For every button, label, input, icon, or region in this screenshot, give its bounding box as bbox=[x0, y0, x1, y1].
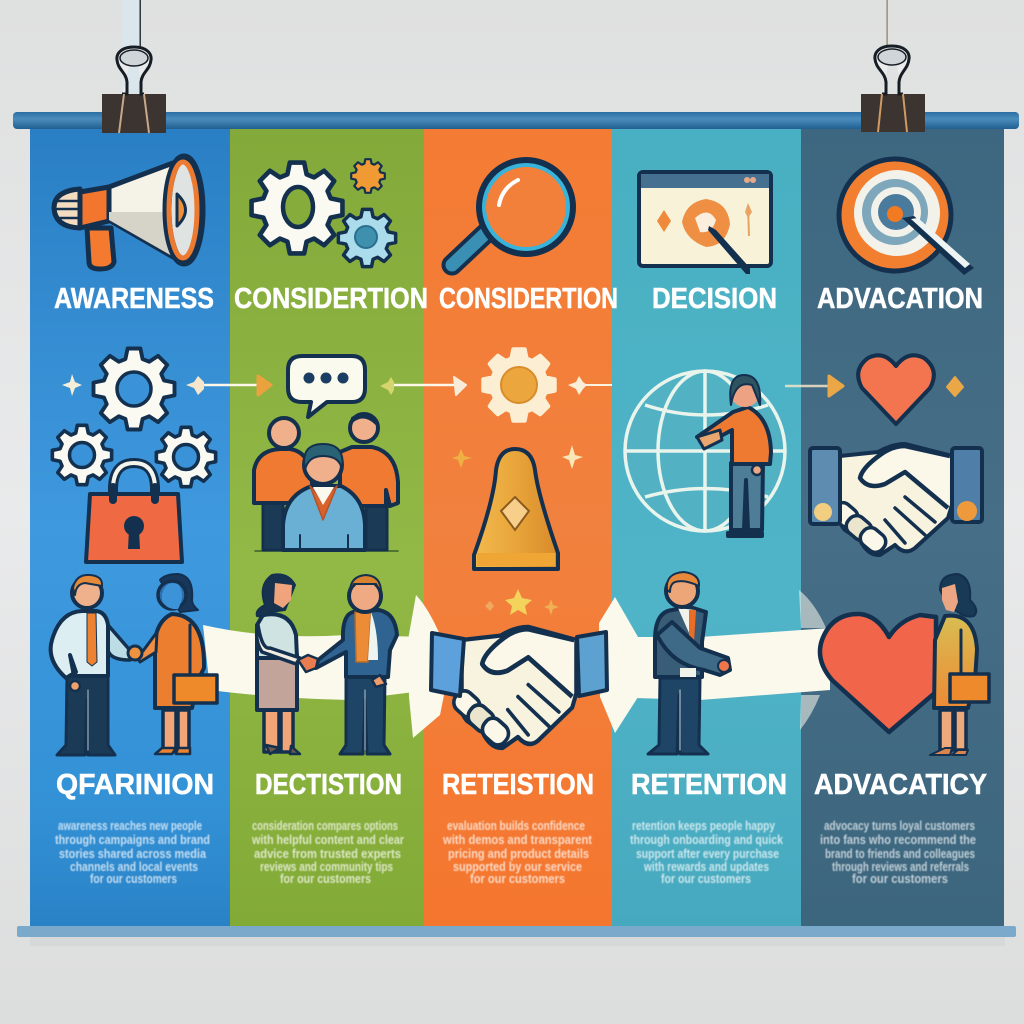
icon: target with arrow bbox=[839, 159, 974, 275]
text block: orange panel body: evaluation builds confidence bbox=[447, 819, 585, 833]
top hanging rod bbox=[13, 112, 1019, 129]
text block: green panel body: for our customers bbox=[280, 872, 371, 886]
text block: orange panel body: for our customers bbox=[470, 872, 565, 886]
icon: light blue gear bbox=[338, 209, 396, 267]
text block: blue panel body: for our customers bbox=[90, 872, 177, 886]
icon: handshake row two bbox=[810, 444, 982, 556]
icon: speech bubble bbox=[288, 356, 365, 417]
icon: golden bell trophy bbox=[474, 449, 558, 569]
icon: person at globe bbox=[697, 375, 771, 536]
figure: woman in green panel bbox=[257, 574, 300, 754]
heading: decision: DECISION bbox=[652, 283, 777, 315]
text block: green panel body: consideration compares options bbox=[252, 819, 398, 833]
icon: large handshake bbox=[431, 627, 607, 749]
heading: retention: RETENTION bbox=[631, 769, 787, 801]
icon: large heart bbox=[820, 614, 936, 732]
text block: teal panel body: with rewards and updates bbox=[643, 860, 769, 874]
icon: star above handshake bbox=[505, 589, 532, 615]
text block: teal panel body: for our customers bbox=[661, 872, 751, 886]
icon: orange small gear bbox=[351, 159, 385, 193]
text block: orange panel body bbox=[442, 819, 593, 886]
panel: awareness column bbox=[30, 129, 230, 926]
icon: clasped hands of green figures bbox=[298, 655, 318, 672]
right hanging string bbox=[886, 0, 888, 48]
light strip behind left string bbox=[122, 0, 140, 95]
icon: sparkle left of bell bbox=[452, 449, 472, 468]
panel: advocacy column bbox=[801, 129, 1004, 926]
icon: faded star right bbox=[544, 599, 559, 615]
text block: dark panel body: through reviews and referrals bbox=[832, 860, 969, 874]
text block: green panel body bbox=[251, 819, 404, 886]
text block: teal panel body: retention keeps people happy bbox=[632, 819, 775, 833]
icon: globe bbox=[625, 371, 785, 531]
flow arrow: teal to dark bbox=[785, 376, 843, 396]
icon: left binder clip bbox=[102, 47, 166, 133]
bottom rod shadow bbox=[30, 937, 1005, 946]
icon: white gear bbox=[252, 163, 342, 253]
flow arrow: orange to teal bbox=[568, 376, 612, 395]
figure: man in green panel bbox=[316, 575, 397, 754]
heading: dectistion: DECTISTION bbox=[255, 769, 402, 801]
icon: megaphone bbox=[54, 158, 201, 269]
figure: man in teal panel bbox=[648, 572, 730, 754]
icon: browser window with cursor bbox=[639, 172, 771, 274]
text block: teal panel body: support after every purchase bbox=[636, 847, 779, 861]
heading: advacation: ADVACATION bbox=[817, 283, 983, 315]
text block: green panel body: with helpful content and clear bbox=[251, 833, 404, 847]
icon: group of three people bbox=[254, 414, 398, 551]
flow arrow: green to orange bbox=[380, 377, 466, 395]
icon: sparkle right of bell bbox=[562, 445, 583, 469]
figure: woman in blue panel bbox=[128, 574, 217, 754]
text block: dark panel body: for our customers bbox=[852, 872, 948, 886]
heading: advacaticy: ADVACATICY bbox=[814, 769, 987, 801]
heading: awareness: AWARENESS bbox=[54, 283, 214, 315]
text block: dark panel body: into fans who recommend the bbox=[820, 833, 976, 847]
text block: orange panel body: supported by our service bbox=[453, 860, 582, 874]
icon: padlock bag bbox=[86, 463, 182, 562]
text block: green panel body: advice from trusted experts bbox=[254, 847, 401, 861]
panel: second consideration column bbox=[424, 129, 612, 926]
text block: dark panel body bbox=[820, 819, 976, 886]
icon: faded star left bbox=[485, 601, 494, 611]
text block: dark panel body: advocacy turns loyal customers bbox=[824, 819, 975, 833]
panel: consideration column bbox=[230, 129, 424, 926]
panel: decision column bbox=[612, 129, 801, 926]
text block: orange panel body: with demos and transparent bbox=[442, 833, 593, 847]
figure: woman in dark panel bbox=[930, 574, 989, 755]
icon: small heart bbox=[858, 355, 934, 424]
text block: blue panel body bbox=[55, 819, 210, 886]
icon: magnifying glass bbox=[452, 161, 572, 265]
heading: consideration: CONSIDERTION bbox=[234, 283, 428, 315]
heading: consideration second: CONSIDERTION bbox=[439, 283, 618, 315]
heading: reteistion: RETEISTION bbox=[442, 769, 594, 801]
text block: blue panel body: stories shared across media bbox=[59, 847, 207, 861]
text block: blue panel body: channels and local events bbox=[70, 860, 198, 874]
text block: green panel body: reviews and community tips bbox=[260, 860, 393, 874]
flow arrow: blue to green bbox=[62, 374, 271, 396]
text block: blue panel body: awareness reaches new people bbox=[58, 819, 202, 833]
connector ribbon: blue to orange bbox=[203, 595, 445, 738]
icon: right binder clip bbox=[861, 46, 925, 132]
figure: man in blue panel bbox=[51, 575, 136, 755]
text block: dark panel body: brand to friends and colleagues bbox=[825, 847, 975, 861]
text block: teal panel body: through onboarding and quick bbox=[630, 833, 783, 847]
text block: teal panel body bbox=[630, 819, 783, 886]
heading: qfarinion: QFARINION bbox=[56, 769, 214, 801]
text block: orange panel body: pricing and product details bbox=[448, 847, 589, 861]
left hanging string bbox=[140, 0, 141, 50]
bottom rod bbox=[17, 926, 1016, 937]
connector arrowhead: fading bbox=[799, 590, 826, 730]
icon: sparkle right bbox=[947, 377, 963, 396]
text block: blue panel body: through campaigns and brand bbox=[55, 833, 210, 847]
connector ribbon: teal to dark bbox=[599, 597, 830, 733]
icon: sun bbox=[483, 349, 555, 421]
icon: three gears bbox=[52, 348, 216, 487]
